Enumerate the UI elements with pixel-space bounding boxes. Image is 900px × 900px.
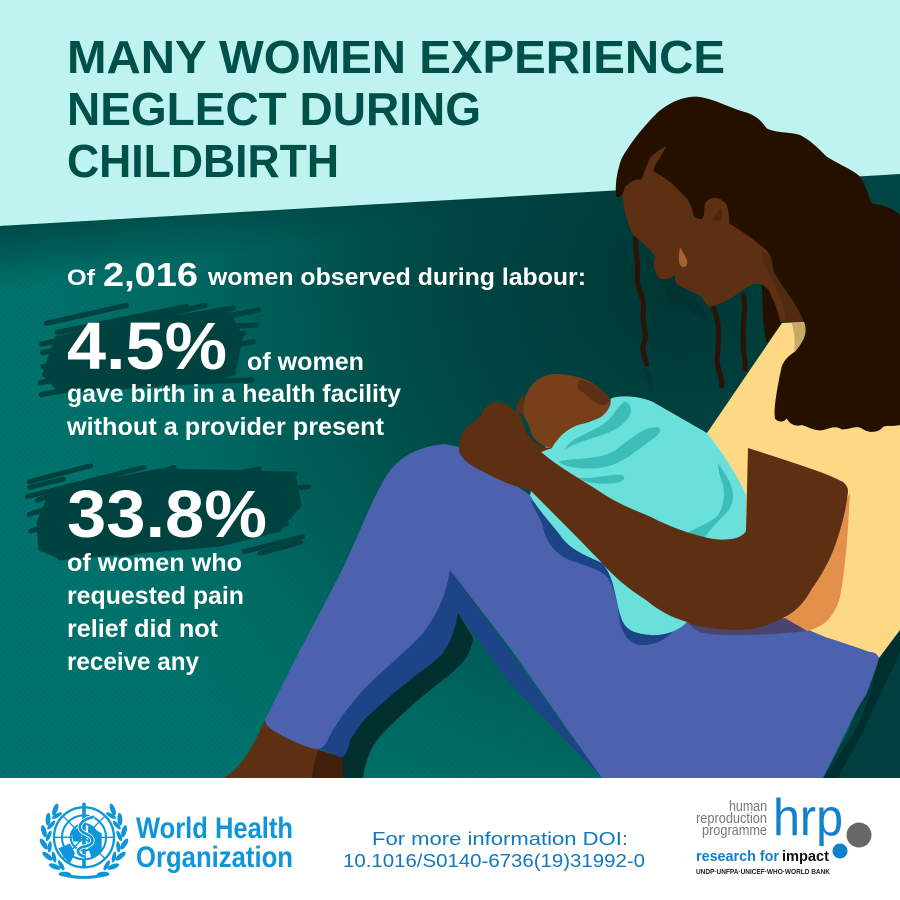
tagline: impact: [782, 849, 829, 865]
foot: [223, 720, 343, 778]
footer DOI text: [343, 828, 645, 871]
wreath ribbon: [62, 872, 106, 879]
trousers: [265, 444, 879, 778]
logo: HRP research for impact: [696, 789, 872, 876]
statistic: 33.8%: relief did not: [67, 615, 219, 643]
braids: [636, 238, 745, 386]
hrp letters: hrp: [773, 789, 843, 847]
title: [67, 31, 725, 187]
mother's face and neck: [623, 143, 804, 322]
illustration: mother and baby: [223, 97, 900, 778]
logo wordmark: Organization: [136, 841, 293, 874]
background: teal panel: [0, 174, 900, 778]
shadow: darker edge beside hip: [823, 625, 900, 778]
wreath right: [97, 803, 130, 877]
logo wordmark: [136, 812, 293, 874]
title: NEGLECT DURING: [67, 83, 481, 135]
tear: [679, 247, 687, 267]
scribble behind 4.5%: [41, 305, 258, 395]
statistic: 4.5%: gave birth in a health facility: [67, 380, 401, 408]
statistic: 33.8%: requested pain: [67, 582, 244, 610]
statistic: 33.8%: receive any: [67, 648, 199, 676]
statistic: 33.8%: 33.8%: [67, 477, 267, 552]
footer panel: [0, 778, 900, 900]
sponsors: UNDP·UNFPA·UNICEF·WHO·WORLD BANK: [696, 867, 830, 876]
programme name: reproduction: [696, 811, 767, 827]
darker inner leg: [320, 570, 602, 778]
shadow: leg on background: [343, 613, 473, 778]
footer DOI text: 10.1016/S0140-6736(19)31992-0: [343, 850, 645, 871]
wreath left: [38, 803, 71, 877]
statistic: 4.5%: [66, 309, 401, 441]
statistic: 4.5%: of women: [247, 348, 364, 376]
shadow: figure on background right: [823, 600, 900, 778]
blanket shadow: [530, 500, 690, 645]
background: pale header: [0, 0, 900, 240]
icon: logo dots: [832, 822, 872, 858]
title: MANY WOMEN EXPERIENCE: [67, 31, 725, 83]
statistic: 33.8%: [67, 477, 267, 676]
blanket folds upper: [558, 402, 660, 484]
programme name: programme: [702, 823, 767, 839]
shirt: [680, 300, 900, 658]
icon: WHO emblem: [38, 803, 130, 879]
scribble behind 33.8%: [27, 466, 309, 560]
intro line: 2,016: [103, 256, 198, 293]
mother's arm holding baby: [459, 402, 848, 630]
intro line: Of: [67, 265, 96, 290]
mother's hair: [616, 97, 900, 432]
hair strands behind neck: [762, 285, 782, 343]
shadow: face and braids on background: [640, 253, 720, 388]
statistic: 33.8%: of women who: [67, 549, 242, 577]
intro line: women observed during labour:: [207, 264, 586, 291]
main trousers shape: [265, 444, 879, 778]
baby head: [516, 374, 611, 448]
logo wordmark: World Health: [136, 812, 293, 845]
statistic: 4.5%: 4.5%: [67, 309, 227, 384]
sleeve shadow: [687, 493, 850, 635]
ear shade: [713, 208, 722, 222]
title: CHILDBIRTH: [67, 135, 339, 187]
footer DOI text: For more information DOI:: [372, 828, 628, 849]
tagline: [696, 849, 829, 865]
collar: [792, 322, 806, 352]
baby blanket: [530, 396, 746, 635]
intro line: [67, 256, 586, 293]
statistic: 4.5%: without a provider present: [66, 413, 385, 441]
logo: World Health Organization: [38, 803, 293, 879]
blanket fold: [687, 463, 733, 538]
tagline: research for: [696, 849, 779, 865]
programme name: [696, 799, 767, 839]
programme name: human: [729, 799, 767, 815]
